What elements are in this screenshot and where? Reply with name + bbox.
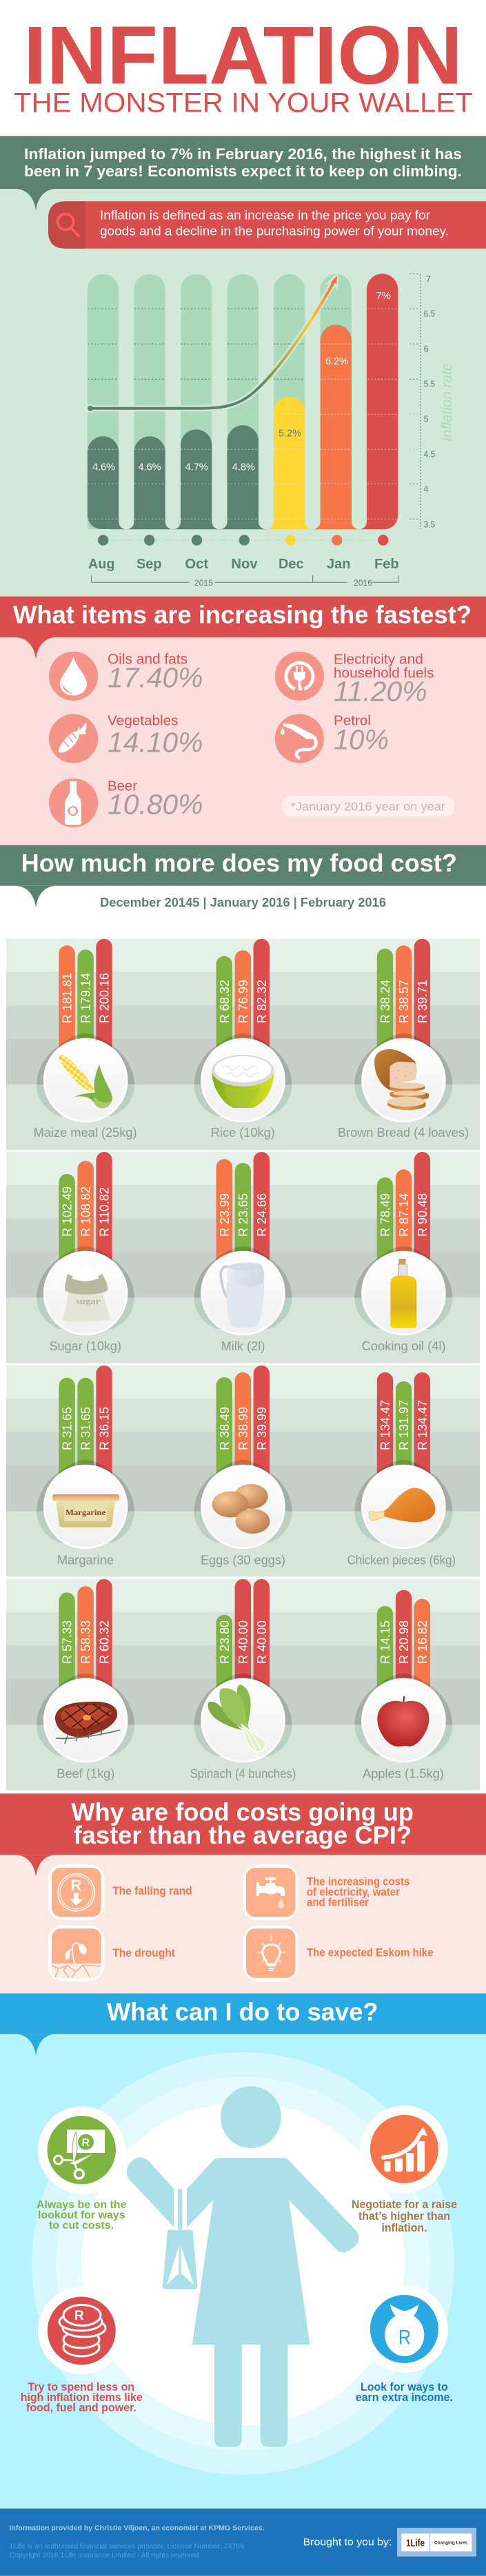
icon: steak xyxy=(55,1702,120,1744)
item: margarine: Margarine xyxy=(57,1554,114,1567)
item: spinach: R 40.00 xyxy=(255,1620,269,1664)
item: brown bread: R 39.71 xyxy=(416,980,429,1023)
brought to you by: Brought to you by: xyxy=(303,2536,392,2548)
item: milk: R 23.65 xyxy=(236,1193,250,1237)
item: beer xyxy=(49,778,203,827)
icon: money bag xyxy=(385,2305,424,2356)
item: chicken pieces: R 134.47 xyxy=(416,1400,429,1450)
icon: rice bowl xyxy=(212,1055,274,1108)
item: maize meal xyxy=(34,939,137,1140)
legend dates: December 20145 | January 2016 | February 2016 xyxy=(100,896,386,909)
panel: food row 1 xyxy=(6,939,480,1150)
item: electricity: household fuels xyxy=(334,665,434,681)
item: brown bread: Brown Bread (4 loaves) xyxy=(338,1126,469,1140)
item: milk: R 24.66 xyxy=(255,1193,269,1237)
heading: What can I do to save? xyxy=(107,1997,378,2026)
definition text xyxy=(100,207,449,238)
item: maize meal: Maize meal (25kg) xyxy=(34,1126,137,1140)
item: cooking oil: R 78.49 xyxy=(378,1193,392,1237)
tip: earn extra: R xyxy=(398,2326,411,2349)
panel: food cost heading xyxy=(0,845,486,909)
item: oils and fats: Oils and fats xyxy=(108,651,188,667)
month labels: Dec xyxy=(279,557,304,572)
banner text: been in 7 years! Economists expect it to keep on climbing. xyxy=(24,163,462,180)
icon: growth chart xyxy=(383,2127,427,2172)
logo: Changing Lives xyxy=(434,2541,467,2546)
icon: sugar sack: sugar xyxy=(76,1296,100,1306)
month labels: Sep xyxy=(136,557,161,572)
icon: magnifier xyxy=(58,214,79,236)
footnote: *January 2016 year on year xyxy=(291,800,445,814)
item: petrol: 10% xyxy=(334,724,389,756)
tip: cut costs: to cut costs. xyxy=(49,2220,114,2232)
panel: food row 3 xyxy=(6,1366,480,1576)
item: spinach: R 23.80 xyxy=(218,1620,232,1664)
icon: scissors and banknote xyxy=(54,2130,105,2178)
axis xyxy=(409,274,435,529)
item: milk: Milk (2l) xyxy=(221,1339,265,1353)
axis: 3.5 xyxy=(424,519,435,529)
panel: inflation jump banner xyxy=(0,136,486,597)
panel: why food costs rise xyxy=(0,1793,486,1993)
item: beer: 10.80% xyxy=(108,789,203,821)
item: electricity: 11.20% xyxy=(334,675,427,707)
item: maize meal: R 181.81 xyxy=(61,973,74,1023)
item: apples: R 14.15 xyxy=(378,1620,392,1664)
axis title: Inflation rate xyxy=(438,363,455,442)
definition text: goods and a decline in the purchasing power of your money. xyxy=(100,223,449,238)
item: spinach: Spinach (4 bunches) xyxy=(190,1767,296,1781)
panel: title header xyxy=(0,0,486,136)
item: margarine: R 31.65 xyxy=(79,1407,93,1450)
icon: margarine tub xyxy=(52,1494,119,1527)
panel: food row 4 xyxy=(6,1579,480,1790)
item: cooking oil: Cooking oil (4l) xyxy=(362,1339,446,1353)
bar values xyxy=(92,291,391,473)
axis: 4.5 xyxy=(424,449,435,459)
bag xyxy=(163,2189,197,2289)
source credit: Information provided by Christie Viljoen, an economist at KPMG Services. xyxy=(10,2525,265,2533)
subtitle: THE MONSTER IN YOUR WALLET xyxy=(14,88,473,119)
icon: spinach xyxy=(207,1684,265,1752)
axis: 6.5 xyxy=(424,309,435,318)
item: chicken pieces: R 134.47 xyxy=(378,1400,392,1450)
panel: fastest increasing items xyxy=(0,597,486,845)
panel: what can I do to save xyxy=(0,1993,486,2508)
item: chicken pieces: Chicken pieces (6kg) xyxy=(347,1554,456,1567)
item: margarine: R 36.15 xyxy=(98,1407,112,1450)
item: rice: R 76.99 xyxy=(236,980,250,1023)
item: spinach xyxy=(190,1579,296,1781)
trend arrow xyxy=(85,273,338,413)
item: petrol xyxy=(275,713,389,763)
bar values: 6.2% xyxy=(325,356,348,367)
item: apples: Apples (1.5kg) xyxy=(363,1767,444,1781)
item: sugar: Sugar (10kg) xyxy=(50,1339,121,1353)
item: eggs: R 39.99 xyxy=(255,1407,269,1450)
month labels: Oct xyxy=(185,557,208,572)
item: maize meal: R 179.14 xyxy=(79,973,93,1023)
item: beef: Beef (1kg) xyxy=(57,1767,114,1781)
item: rice xyxy=(194,939,292,1140)
legal text xyxy=(10,2543,244,2559)
item: sugar xyxy=(37,1152,134,1353)
item: rice: R 82.32 xyxy=(255,980,269,1023)
legal text: Copyright 2016 1Life Insurance Limited - All rights reserved. xyxy=(10,2552,201,2559)
item: beef: R 60.32 xyxy=(98,1620,112,1664)
item: eggs: R 38.49 xyxy=(218,1407,232,1450)
item: apples: R 20.98 xyxy=(397,1620,411,1664)
heading: faster than the average CPI? xyxy=(74,1821,412,1849)
axis: 7 xyxy=(426,274,431,284)
icon: bread loaf xyxy=(374,1049,429,1110)
reason: falling rand xyxy=(48,1864,192,1920)
timeline dots xyxy=(98,535,389,546)
item: eggs xyxy=(194,1366,292,1567)
month labels xyxy=(88,557,399,572)
item: electricity: Electricity and xyxy=(334,651,423,667)
tip: cut costs: Always be on the xyxy=(37,2199,127,2211)
item: vegetables xyxy=(49,713,203,763)
item: cooking oil xyxy=(354,1152,452,1353)
tip: spend less xyxy=(21,2287,143,2414)
item: rice: R 68.32 xyxy=(218,980,232,1023)
month labels: Feb xyxy=(374,557,399,572)
tip: negotiate raise: inflation. xyxy=(382,2221,427,2234)
reason: falling rand: R xyxy=(70,1877,81,1894)
item: apples xyxy=(354,1590,452,1781)
bar values: 4.6% xyxy=(92,462,115,473)
tip: spend less: high inflation items like xyxy=(21,2391,143,2404)
callout: definition xyxy=(48,201,486,249)
axis: 5 xyxy=(424,414,429,424)
axis: 6 xyxy=(424,344,429,353)
item: margarine xyxy=(37,1366,134,1567)
tip: cut costs: lookout for ways xyxy=(38,2209,125,2221)
item: eggs: R 38.99 xyxy=(236,1407,250,1450)
year brackets: 2015 xyxy=(194,578,213,588)
axis: 4 xyxy=(424,484,429,494)
reason: electricity, water, fertiliser: and fertiliser xyxy=(307,1896,369,1908)
reason: electricity, water, fertiliser: The increasing costs xyxy=(307,1876,409,1888)
tip: cut costs xyxy=(37,2106,127,2232)
legal text: 1Life is an authorised financial services provider. Licence Number: 24769 xyxy=(10,2543,244,2551)
tip: earn extra: earn extra income. xyxy=(356,2391,453,2404)
item: oils and fats: 17.40% xyxy=(108,661,203,693)
bar values: 4.8% xyxy=(232,462,255,473)
item: maize meal: R 200.16 xyxy=(98,973,112,1023)
reason: electricity, water, fertiliser xyxy=(243,1864,409,1920)
panel: food row 2 xyxy=(6,1152,480,1363)
icon: sugar sack xyxy=(62,1262,110,1322)
item: vegetables: 14.10% xyxy=(108,727,203,759)
item: beef xyxy=(37,1579,134,1781)
year brackets: 2016 xyxy=(354,578,372,588)
item: apples: R 16.82 xyxy=(416,1620,429,1664)
panel: footer xyxy=(0,2508,486,2576)
reason: Eskom hike xyxy=(243,1925,434,1981)
icon: chicken drumstick xyxy=(369,1488,435,1522)
item: milk: R 23.99 xyxy=(218,1193,232,1237)
title: INFLATION xyxy=(23,10,463,102)
banner text xyxy=(24,145,462,180)
tip: earn extra: Look for ways to xyxy=(361,2380,448,2393)
item: brown bread: R 38.57 xyxy=(397,980,411,1023)
icon: milk jug xyxy=(221,1262,264,1328)
reason: drought: The drought xyxy=(112,1947,176,1959)
icon: scissors and banknote: R xyxy=(81,2137,90,2149)
reason: electricity, water, fertiliser: of electricity, water xyxy=(307,1886,401,1898)
bar values: 4.7% xyxy=(185,462,208,473)
figure: person with bag xyxy=(127,2086,359,2447)
tip: spend less: food, fuel and power. xyxy=(26,2401,136,2414)
logo: 1Life xyxy=(406,2537,425,2549)
reason: Eskom hike: The expected Eskom hike xyxy=(307,1946,434,1959)
item: chicken pieces xyxy=(347,1372,456,1567)
axis: 5.5 xyxy=(424,379,435,389)
month labels: Jan xyxy=(327,557,350,572)
item: oils and fats xyxy=(49,651,203,701)
year brackets xyxy=(92,575,398,588)
logo xyxy=(397,2528,476,2557)
item: petrol: Petrol xyxy=(334,713,371,729)
month labels: Nov xyxy=(231,557,258,572)
tip: spend less: R xyxy=(74,2309,84,2323)
item: cooking oil: R 90.48 xyxy=(416,1193,429,1237)
item: brown bread xyxy=(338,939,469,1140)
tip: spend less: Try to spend less on xyxy=(28,2380,134,2393)
item: rice: Rice (10kg) xyxy=(211,1126,275,1140)
month labels: Aug xyxy=(88,557,114,572)
bar values: 4.6% xyxy=(138,462,161,473)
heading xyxy=(71,1798,414,1849)
item: brown bread: R 38.24 xyxy=(378,980,392,1023)
icon: margarine tub: Margarine xyxy=(65,1507,106,1517)
icon: coins xyxy=(59,2305,105,2356)
banner text: Inflation jumped to 7% in February 2016, the highest it has xyxy=(24,145,462,163)
item: milk xyxy=(194,1152,292,1353)
item: sugar: R 110.82 xyxy=(98,1187,112,1237)
tip: negotiate raise: that’s higher than xyxy=(358,2209,450,2223)
item: beer: Beer xyxy=(108,778,137,794)
item: vegetables: Vegetables xyxy=(108,713,178,729)
heading: What items are increasing the fastest? xyxy=(13,600,472,628)
reason: drought xyxy=(48,1925,176,1981)
heading: How much more does my food cost? xyxy=(21,849,457,877)
bar values: 7% xyxy=(376,291,391,302)
tip: negotiate raise xyxy=(352,2105,457,2234)
icon: oil bottle xyxy=(390,1259,416,1328)
icon: apple xyxy=(377,1696,429,1746)
icon: corn xyxy=(59,1054,112,1109)
definition text: Inflation is defined as an increase in the price you pay for xyxy=(100,207,430,222)
item: beef: R 57.33 xyxy=(61,1620,74,1664)
tip: earn extra xyxy=(356,2285,453,2404)
bar chart: inflation rate xyxy=(85,273,455,588)
item: sugar: R 108.82 xyxy=(79,1186,93,1237)
tip: negotiate raise: Negotiate for a raise xyxy=(352,2198,457,2211)
bar values: 5.2% xyxy=(279,428,301,439)
item: chicken pieces: R 131.97 xyxy=(397,1400,411,1450)
reason: falling rand: The falling rand xyxy=(112,1885,192,1897)
item: spinach: R 40.00 xyxy=(236,1620,250,1664)
item: cooking oil: R 87.14 xyxy=(397,1193,411,1237)
item: electricity xyxy=(275,651,434,707)
footnote xyxy=(282,796,454,816)
item: beef: R 58.33 xyxy=(79,1620,93,1664)
item: eggs: Eggs (30 eggs) xyxy=(201,1554,285,1567)
item: sugar: R 102.49 xyxy=(61,1186,74,1237)
item: margarine: R 31.65 xyxy=(61,1407,74,1450)
heading: Why are food costs going up xyxy=(71,1798,414,1826)
icon: eggs xyxy=(212,1484,270,1534)
